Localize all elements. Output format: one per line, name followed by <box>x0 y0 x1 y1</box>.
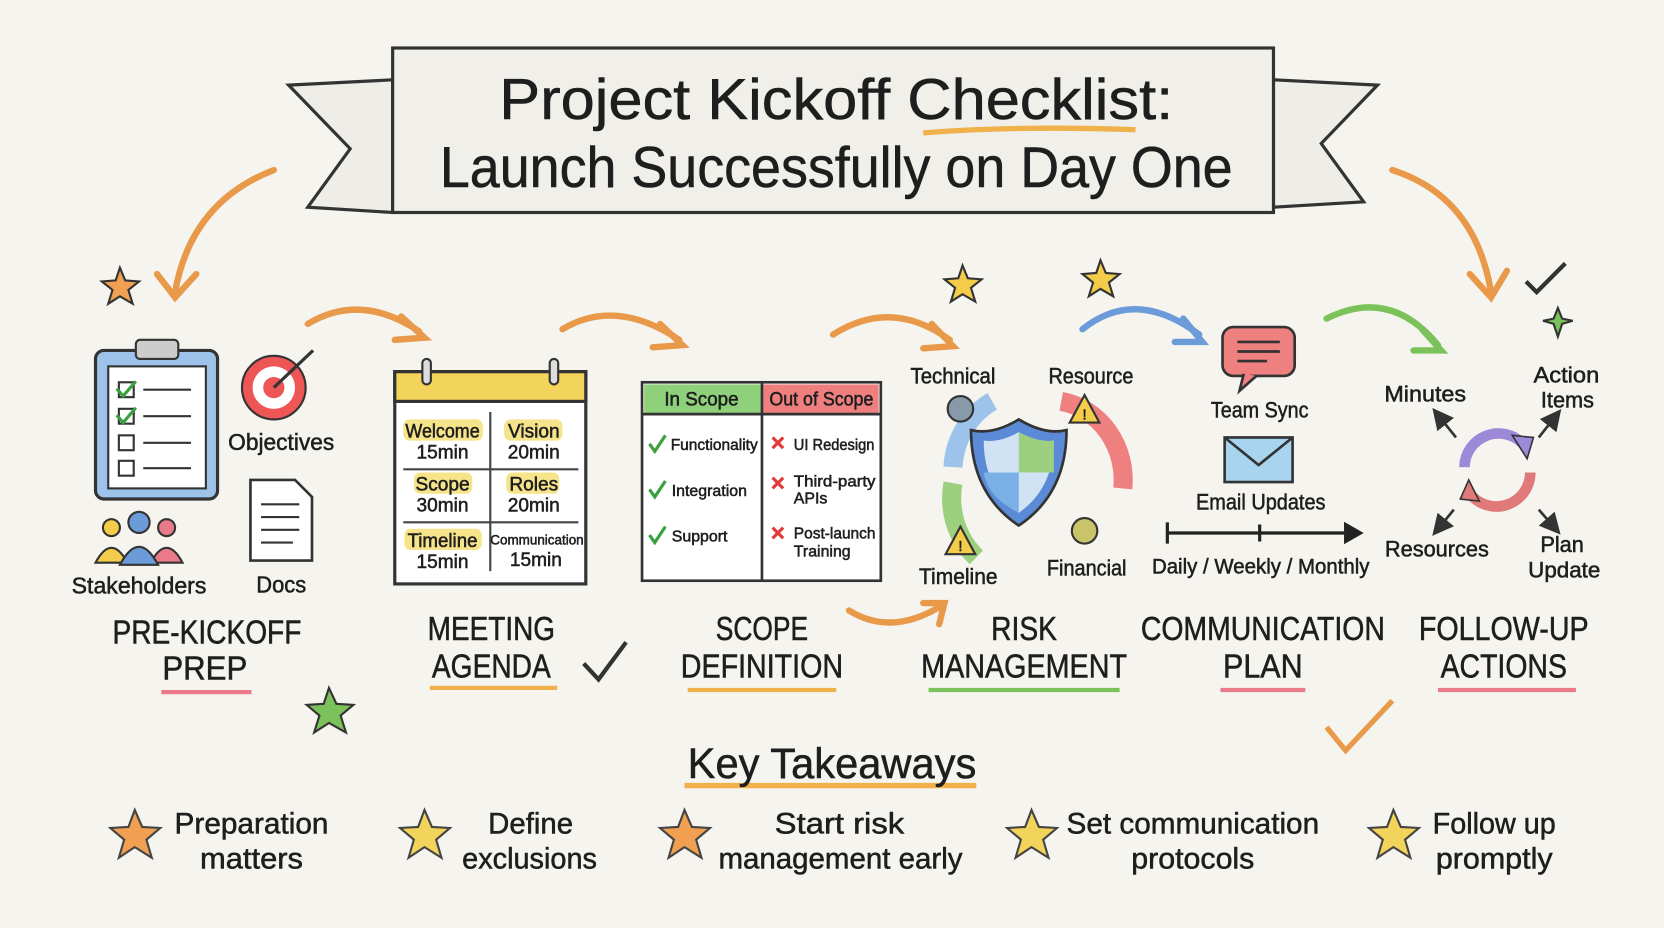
icon: calendar agenda: Scope <box>415 475 470 496</box>
icon: chat bubble <box>1223 327 1295 391</box>
panel: pre-kickoff prep <box>72 340 334 692</box>
panel: meeting agenda: MEETING <box>428 610 555 647</box>
icon: calendar agenda: Timeline <box>408 531 478 552</box>
panel: follow-up actions: Plan <box>1540 532 1584 557</box>
panel: pre-kickoff prep: Docs <box>256 571 306 597</box>
table: in scope / out of scope: Support <box>672 528 728 545</box>
takeaways row: promptly <box>1436 842 1553 875</box>
icon: calendar agenda: Welcome <box>405 421 480 442</box>
icon: shield <box>971 419 1067 526</box>
panel: scope definition: SCOPE <box>716 610 808 647</box>
table: in scope / out of scope: Integration <box>672 483 747 500</box>
panel: pre-kickoff prep: Stakeholders <box>72 572 206 598</box>
panel: pre-kickoff prep: PRE-KICKOFF <box>112 613 301 650</box>
panel: follow-up actions: FOLLOW-UP <box>1419 610 1589 647</box>
icon: clipboard <box>96 340 218 499</box>
table: in scope / out of scope <box>642 382 881 581</box>
takeaways row: Preparation <box>175 807 328 840</box>
panel: follow-up actions: Update <box>1528 558 1600 583</box>
icon: calendar agenda: 15min <box>510 550 562 571</box>
takeaways row: matters <box>200 842 303 875</box>
takeaways row: Follow up <box>1433 807 1556 840</box>
takeaways row: Start risk <box>775 807 904 840</box>
panel: communication plan: PLAN <box>1223 647 1303 684</box>
icon: calendar agenda: 15min <box>417 443 469 464</box>
icon: stakeholders <box>96 512 183 565</box>
title banner: Project Kickoff Checklist: <box>499 68 1173 132</box>
icon: document <box>250 480 312 561</box>
panel: follow-up actions: ACTIONS <box>1441 647 1567 684</box>
table: in scope / out of scope: In Scope <box>664 390 739 411</box>
takeaways row: management early <box>718 842 963 875</box>
panel: communication plan: COMMUNICATION <box>1141 610 1385 647</box>
arrows flow <box>157 170 1507 624</box>
icon: calendar agenda: Vision <box>508 421 560 442</box>
diagram: risk wheel: ! <box>958 539 962 555</box>
icon: calendar agenda: 20min <box>508 443 560 464</box>
icon: calendar agenda: 20min <box>508 496 560 517</box>
icon: calendar agenda <box>395 359 586 584</box>
icon: target <box>242 350 313 419</box>
panel: scope definition <box>642 382 881 690</box>
title banner: Launch Successfully on Day One <box>440 136 1233 200</box>
panel: risk management: Timeline <box>919 564 998 589</box>
icon: envelope <box>1225 437 1293 482</box>
panel: risk management: Financial <box>1047 555 1126 580</box>
panel: follow-up actions: Items <box>1541 388 1594 413</box>
timeline arrow <box>1167 522 1360 544</box>
panel: communication plan: Team Sync <box>1211 397 1308 422</box>
panel: pre-kickoff prep: PREP <box>162 649 247 686</box>
takeaways row <box>110 807 1556 875</box>
diagram: risk wheel: ! <box>1083 407 1087 423</box>
panel: risk management <box>911 363 1133 690</box>
panel: communication plan: Email Updates <box>1196 490 1325 515</box>
icon: calendar agenda: Communication <box>490 533 584 548</box>
icon: cycle arrows <box>1464 433 1530 506</box>
panel: follow-up actions: Resources <box>1385 536 1489 561</box>
panel: meeting agenda <box>395 359 586 688</box>
panel: communication plan <box>1141 327 1385 690</box>
diagram: risk wheel <box>946 395 1123 557</box>
table: in scope / out of scope: Out of Scope <box>769 390 873 411</box>
panel: pre-kickoff prep: Objectives <box>228 429 334 455</box>
panel: risk management: Resource <box>1048 363 1133 388</box>
panel: follow-up actions: Action <box>1533 362 1599 387</box>
takeaways row: protocols <box>1131 842 1254 875</box>
title banner <box>289 48 1377 212</box>
panel: risk management: RISK <box>991 610 1057 647</box>
icon: calendar agenda: Roles <box>509 475 558 496</box>
takeaways row: exclusions <box>462 842 597 875</box>
heading: key takeaways: Key Takeaways <box>688 740 976 787</box>
panel: follow-up actions: Minutes <box>1384 381 1466 406</box>
table: in scope / out of scope: Post-launch <box>794 525 876 542</box>
panel: meeting agenda: AGENDA <box>432 647 551 684</box>
table: in scope / out of scope: UI Redesign <box>794 437 874 454</box>
panel: risk management: Technical <box>911 363 995 388</box>
table: in scope / out of scope: Training <box>794 543 851 560</box>
icon: calendar agenda: 30min <box>417 496 469 517</box>
panel: risk management: MANAGEMENT <box>921 647 1127 684</box>
icon: calendar agenda: 15min <box>417 552 469 573</box>
takeaways row: Define <box>488 807 573 840</box>
panel: scope definition: DEFINITION <box>681 647 843 684</box>
panel: follow-up actions <box>1384 362 1600 690</box>
table: in scope / out of scope: Third-party <box>794 473 876 490</box>
takeaways row: Set communication <box>1067 807 1319 840</box>
panel: communication plan: Daily / Weekly / Monthly <box>1152 555 1370 578</box>
table: in scope / out of scope: Functionality <box>671 437 758 454</box>
decorative stars <box>102 260 1573 751</box>
table: in scope / out of scope: APIs <box>794 490 827 507</box>
